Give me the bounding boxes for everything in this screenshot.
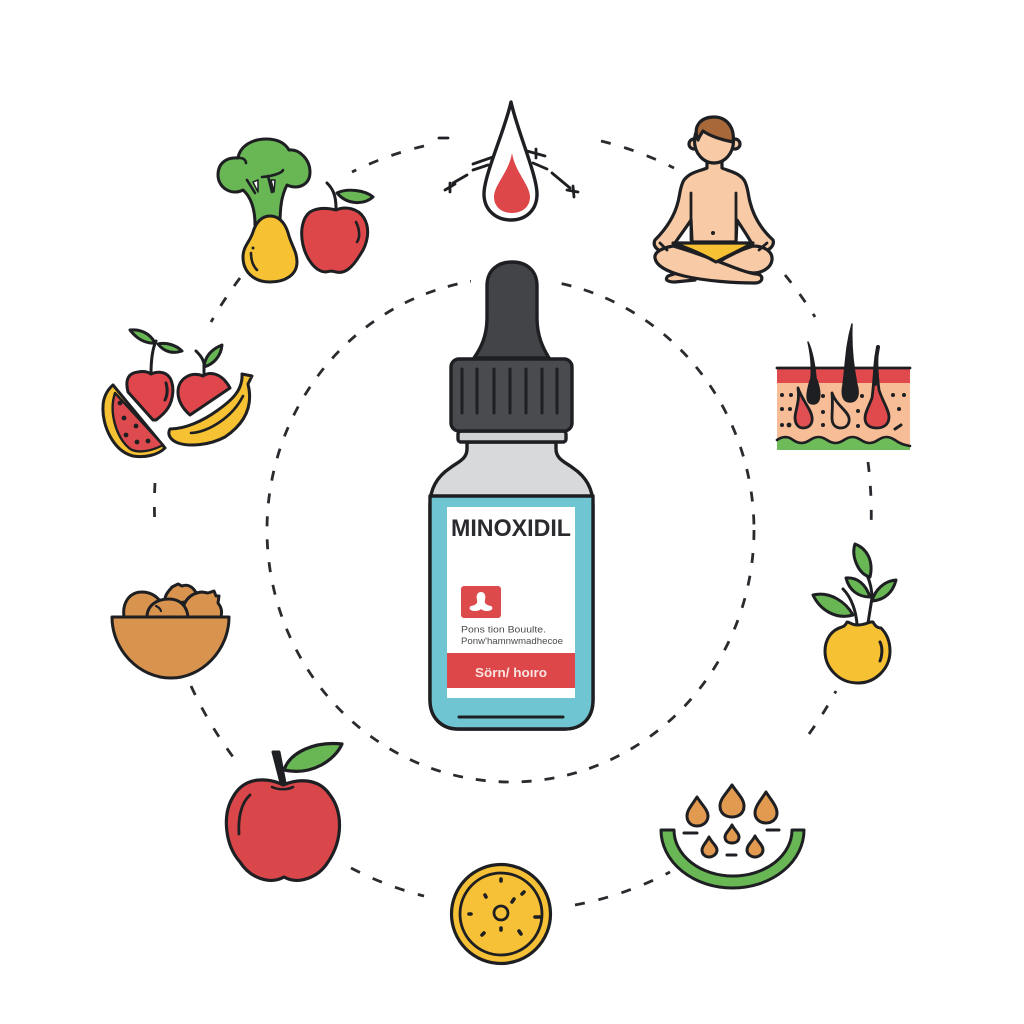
shorts: [673, 243, 753, 262]
base line: [459, 716, 563, 718]
hair: [696, 117, 733, 142]
icon: sprouting yellow fruit: [813, 544, 896, 683]
label small text: Pons tion Bouulte.: [461, 624, 546, 636]
bottle label: [447, 507, 575, 698]
apple: [302, 208, 368, 272]
neck collar: [458, 431, 566, 442]
broccoli: [218, 139, 310, 225]
cap ridges: [462, 369, 557, 413]
pear: [243, 216, 297, 282]
bottle label: Ponw'hamnwmadhecoe: [461, 636, 563, 647]
inner dashed ring: [267, 265, 754, 782]
icon: seeds over melon rind: [661, 785, 804, 888]
product name: MINOXIDIL: [451, 515, 571, 542]
red volume band: [447, 653, 575, 688]
label icon: [461, 586, 501, 618]
icon: blood drop: [439, 102, 578, 220]
central minoxidil bottle: [430, 262, 593, 729]
watermelon wedge: [103, 385, 165, 457]
icon: citrus slice: [452, 864, 550, 964]
icon: person meditating: [654, 117, 773, 283]
follicles: [795, 388, 812, 428]
banana: [169, 374, 252, 445]
dropper cap: [451, 359, 572, 431]
icon: red apple: [226, 744, 342, 880]
hairs: [807, 342, 820, 404]
left leg: [655, 246, 762, 283]
leaves: [854, 544, 871, 577]
dropper bulb: [474, 262, 549, 358]
right thigh: [717, 246, 772, 273]
skin pores: [780, 393, 906, 429]
blue liquid: [430, 496, 593, 729]
bottle glass body: [430, 442, 593, 729]
icon: watermelon, cherries and banana: [103, 330, 252, 457]
icon: bowl of nuts: [112, 584, 229, 678]
back foot: [666, 272, 695, 282]
bottle label: Sörn/ hoıro: [475, 666, 547, 680]
torso and arms: [654, 160, 773, 252]
icon: scalp and hair follicles: [777, 324, 910, 450]
outer dashed ring: [154, 141, 871, 905]
icon: broccoli, pear and apple: [218, 139, 373, 282]
head: [694, 119, 734, 163]
ears: [689, 139, 699, 149]
